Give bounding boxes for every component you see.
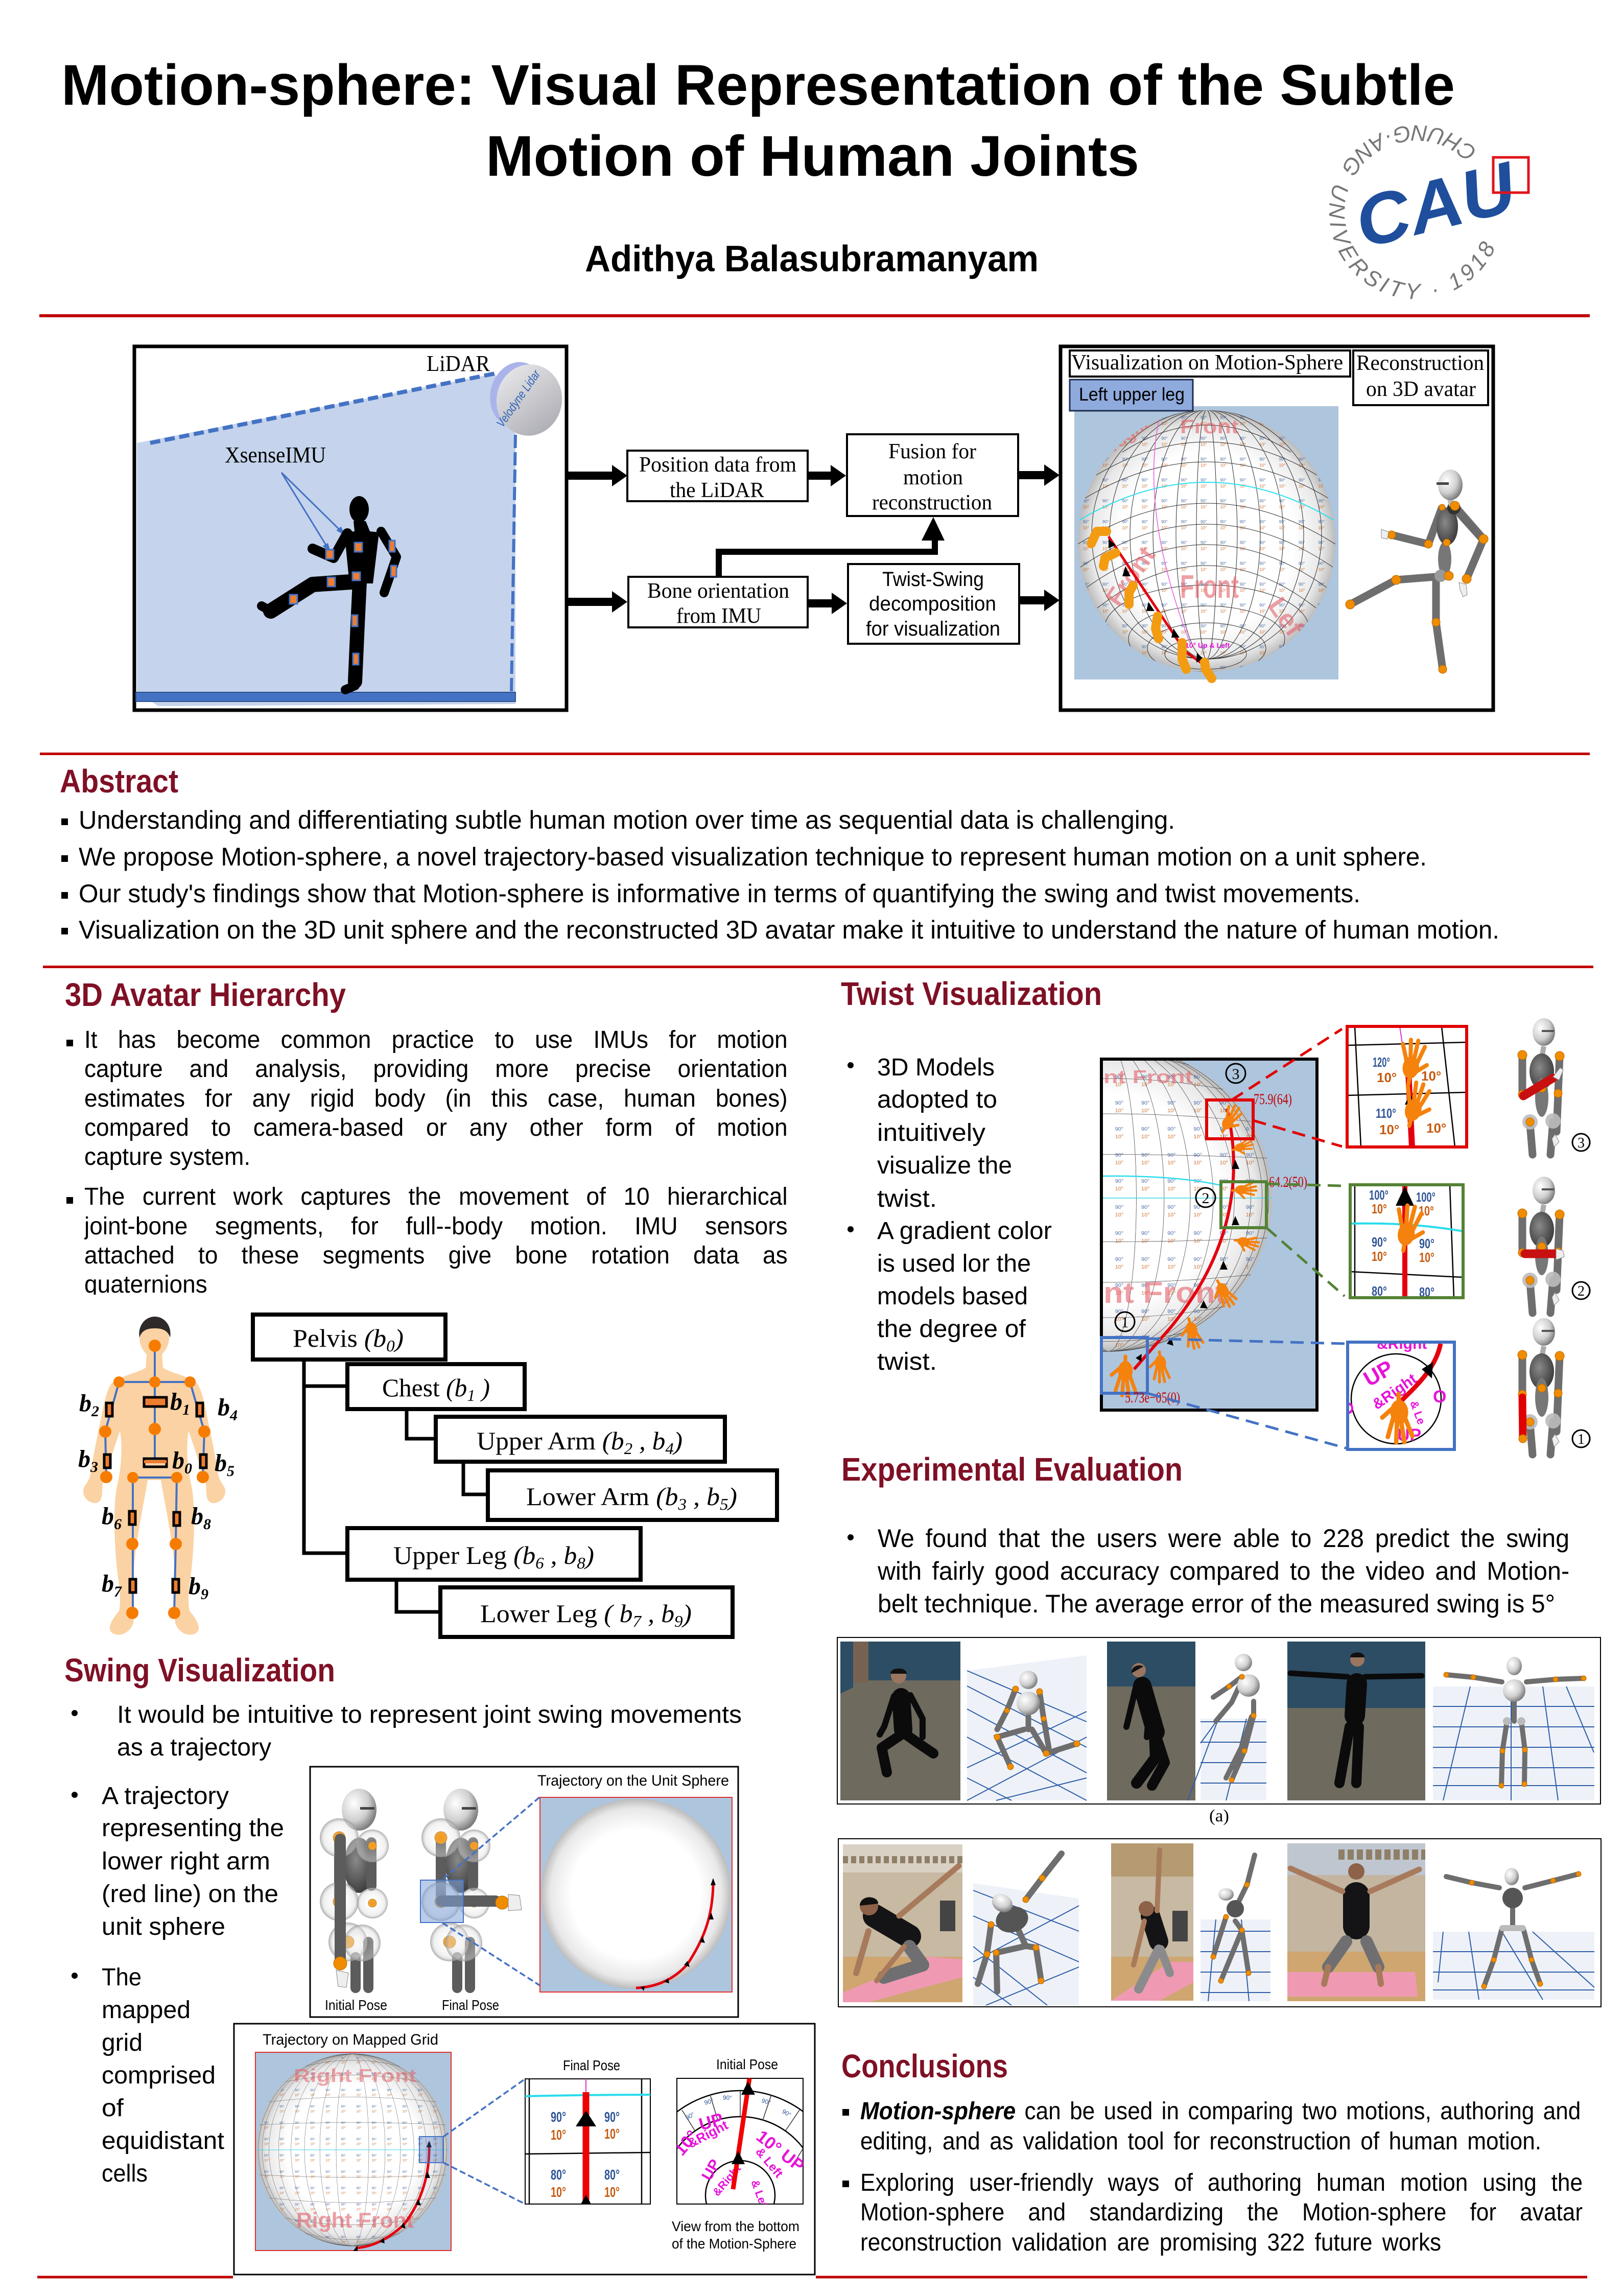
inset: blue twist detail: UP: [1397, 1425, 1421, 1445]
inset: green twist detail: 80°: [1372, 1283, 1387, 1299]
label: reconstruction on 3D avatar: [1353, 350, 1488, 405]
chart: joint hierarchy tree: ): [672, 1426, 682, 1455]
arrows: sensor pointer: [281, 473, 344, 551]
mannequin 3: 3: [1578, 1135, 1585, 1151]
box: fusion: motion: [903, 466, 963, 489]
bullet: experimental evaluation: [848, 1534, 854, 1540]
text block: experimental evaluation: [878, 1517, 1572, 1625]
panel: trajectory on the unit sphere: Initial Pose: [325, 1997, 387, 2013]
bone labels: b: [218, 1394, 230, 1421]
text block: abstract bullets: We propose Motion-sphere, a novel trajectory-based visualization technique to represent human motion on a unit sphere.: [79, 842, 1427, 871]
chart: joint hierarchy tree: 8: [577, 1554, 585, 1572]
inset: green twist detail: 90°: [1372, 1234, 1387, 1250]
text block: hierarchy paragraph 1: It has become common practice to use IMUs for motion: [84, 1026, 788, 1053]
text block: conclusions: Exploring user-friendly ways of authoring human motion using the: [860, 2169, 1583, 2196]
mannequin 1: [1518, 1318, 1590, 1455]
text block: swing bullets: representing the: [102, 1815, 284, 1842]
chart: joint hierarchy tree: Chest (b: [382, 1373, 467, 1402]
sphere with mapped grid: Right Front: [294, 2065, 416, 2086]
render: X pose avatar: [1433, 1868, 1594, 2000]
bone labels: b: [102, 1503, 114, 1530]
panel: trajectory on the unit sphere: Final Pose: [442, 1997, 499, 2013]
inset: initial pose: 90°: [761, 2097, 772, 2106]
render: side bend avatar: [1201, 1855, 1270, 2001]
chart: joint hierarchy tree: 0: [386, 1337, 395, 1355]
inset: green twist detail: 100°: [1369, 1187, 1388, 1203]
chart: joint hierarchy tree: ): [681, 1599, 692, 1628]
text block: hierarchy paragraph 1: estimates for any rigid body (in this case, human bones): [84, 1085, 788, 1112]
chart: joint hierarchy tree: 3: [677, 1495, 687, 1513]
bone labels: 4: [229, 1407, 238, 1424]
text block: swing bullets: equidistant: [102, 2127, 224, 2154]
callout lines: [1147, 1029, 1347, 1448]
title: Motion of Human Joints: [486, 124, 1139, 188]
text block: swing bullets: unit sphere: [102, 1913, 225, 1940]
render: lunge avatar: [967, 1655, 1087, 1800]
inset: blue twist detail: &Right: [1377, 1336, 1427, 1352]
chart: motion sphere with left upper leg trajectory: Right: [1105, 414, 1152, 456]
text block: conclusions: Motion-sphere and standardizing the Motion-sphere for avatar: [860, 2199, 1583, 2226]
text block: swing bullets: The: [102, 1964, 142, 1991]
box: bone orientation: from IMU: [676, 604, 761, 628]
photo: lunge: [840, 1642, 960, 1800]
heading: 3D avatar hierarchy: 3D Avatar Hierarchy: [65, 976, 346, 1013]
chart: twist trajectory on sphere: 5.73e−05(0): [1125, 1389, 1180, 1406]
inset: green twist detail: [1350, 1185, 1463, 1300]
text block: abstract bullets: Our study's findings show that Motion-sphere is informative in terms of quantifying the swing and twist movements.: [79, 879, 1360, 908]
inset: initial pose: & Left: [748, 2178, 771, 2213]
text block: swing bullets: [72, 1701, 742, 2187]
university logo: CHUNG·ANG: [1344, 125, 1474, 175]
caption: bottom view: View from the bottom: [672, 2218, 799, 2234]
inset: initial pose: [676, 2078, 804, 2205]
text block: twist bullets: twist.: [877, 1185, 937, 1212]
text block: conclusions: [860, 2090, 1586, 2263]
text block: hierarchy paragraph 2: [84, 1180, 788, 1295]
chart: twist trajectory on sphere: nt Front: [1103, 1276, 1226, 1309]
inset: blue twist detail: & Le: [1407, 1399, 1428, 1426]
chart: joint hierarchy tree: ): [393, 1324, 404, 1352]
box: position data: [627, 451, 808, 502]
heading: experimental evaluation: Experimental Evaluation: [841, 1451, 1183, 1488]
box: twist-swing: for visualization: [866, 618, 1000, 640]
inset: red twist detail: 10°: [1421, 1068, 1441, 1084]
panel: trajectory on mapped grid: Trajectory on Mapped Grid: [263, 2031, 438, 2048]
mannequin: final pose: [421, 1789, 490, 1988]
text block: swing bullets: A trajectory: [102, 1783, 229, 1810]
bone labels: b: [189, 1573, 201, 1600]
inset: initial pose: UP: [698, 2157, 724, 2184]
text block: hierarchy paragraph 2: The current work captures the movement of 10 hierarchical: [84, 1183, 788, 1210]
inset: initial pose: &Right: [710, 2162, 744, 2198]
text block: twist bullets: intuitively: [877, 1119, 985, 1146]
inset: initial pose: 90°: [723, 2094, 732, 2101]
caption: bottom view: [672, 2218, 799, 2252]
bone labels: b: [170, 1388, 182, 1415]
box: twist-swing: [848, 564, 1019, 644]
inset: blue twist detail: O: [1337, 1401, 1357, 1415]
label: reconstruction on 3D avatar: on 3D avatar: [1366, 378, 1476, 401]
heading: twist visualization: Twist Visualization: [841, 975, 1102, 1012]
text block: swing bullets: as a trajectory: [117, 1734, 271, 1761]
box: bone orientation: Bone orientation: [647, 579, 789, 603]
bone labels: b: [79, 1390, 91, 1417]
text block: twist bullets: the degree of: [877, 1316, 1026, 1343]
inset: green twist detail: 10°: [1419, 1250, 1434, 1265]
box: fusion: [847, 434, 1018, 516]
chart: joint hierarchy tree: 7: [633, 1612, 642, 1630]
photo: T pose: [1287, 1642, 1425, 1800]
box: position data: the LiDAR: [670, 479, 764, 502]
box: fusion: reconstruction: [872, 491, 992, 514]
text block: abstract bullets: [61, 806, 1499, 944]
text block: conclusions: editing, and as validation tool for reconstruction of human motion.: [860, 2128, 1541, 2155]
chart: twist trajectory on sphere: 1: [1121, 1314, 1129, 1331]
chart: motion sphere with left upper leg trajectory: Front: [1100, 541, 1161, 611]
heading: abstract: Abstract: [60, 763, 178, 800]
sphere with mapped grid: Right Front: [296, 2208, 414, 2232]
chart: joint hierarchy tree: Pelvis (b: [293, 1324, 386, 1352]
render: reach avatar: [973, 1854, 1079, 2005]
text block: conclusions: Motion-sphere can be used in comparing two motions, authoring and: [860, 2098, 1581, 2125]
text block: abstract bullets: Visualization on the 3D unit sphere and the reconstructed 3D avatar make it intuitive to understand the nature of human motion.: [79, 916, 1499, 944]
chart: joint hierarchy tree: , b: [544, 1541, 577, 1569]
text block: hierarchy paragraph 2: joint-bone segments, for full--body motion. IMU sensors: [84, 1213, 788, 1240]
panel: trajectory on the unit sphere: Trajectory on the Unit Sphere: [537, 1772, 729, 1789]
box: fusion: Fusion for: [888, 440, 976, 463]
label: visualization on motion-sphere: Visualization on Motion-Sphere: [1071, 351, 1343, 374]
inset: red twist detail: 10°: [1379, 1122, 1399, 1137]
chart: twist trajectory on sphere: [945, 1045, 1317, 1410]
inset: final pose: 10°: [551, 2127, 566, 2143]
caption: (a): (a): [1209, 1807, 1229, 1825]
inset: final pose: 80°: [604, 2167, 620, 2183]
text block: swing bullets: grid: [102, 2029, 143, 2056]
inset: green twist detail: 10°: [1372, 1201, 1387, 1216]
text block: twist bullets: A gradient color: [877, 1217, 1052, 1245]
bone labels: 2: [91, 1403, 99, 1420]
inset: red twist detail: 10°: [1426, 1120, 1446, 1136]
chart: joint hierarchy tree: 5: [720, 1495, 728, 1513]
text block: hierarchy paragraph 1: capture and analysis, providing more precise orientation: [84, 1056, 788, 1083]
inset: initial pose: 90°: [703, 2097, 714, 2106]
inset: blue twist detail: O: [1433, 1387, 1446, 1407]
mannequin 3: [1518, 1018, 1590, 1155]
chart: joint hierarchy tree: , b: [641, 1599, 674, 1628]
text block: abstract bullets: Understanding and differentiating subtle human motion over time as sequential data is challenging.: [79, 806, 1175, 834]
bone labels: 1: [182, 1401, 190, 1418]
inset: blue twist detail: &Right: [1369, 1370, 1420, 1413]
heading: swing visualization: Swing Visualization: [64, 1652, 335, 1689]
label: Xsense IMU: XsenseIMU: [225, 442, 326, 467]
text block: hierarchy paragraph 1: [84, 1022, 788, 1180]
title: Motion-sphere: Visual Representation of the Subtle: [61, 53, 1455, 117]
bone labels: 9: [201, 1586, 208, 1603]
bone labels: [78, 1388, 238, 1603]
author: Adithya Balasubramanyam: [585, 239, 1039, 279]
university logo: CAU: [1347, 146, 1525, 263]
bone labels: 8: [203, 1516, 211, 1533]
inset: green twist detail: 90°: [1419, 1236, 1434, 1251]
inset: initial pose: 10° UP: [752, 2126, 808, 2176]
label: reconstruction on 3D avatar: Reconstruction: [1356, 352, 1484, 375]
inset: initial pose: 90°: [781, 2107, 792, 2119]
bone labels: b: [191, 1503, 203, 1530]
bone labels: 5: [227, 1463, 234, 1480]
inset: final pose: 10°: [551, 2184, 566, 2200]
inset: initial pose: 10°: [670, 2127, 702, 2160]
text block: experimental evaluation: with fairly good accuracy compared to the video and Motion-: [878, 1557, 1569, 1585]
bone labels: 6: [114, 1516, 122, 1533]
mannequin 1: 1: [1578, 1432, 1585, 1447]
text block: hierarchy paragraph 1: capture system.: [84, 1143, 250, 1170]
bullets: hierarchy text: [66, 1040, 73, 1204]
bullets: conclusions: [842, 2109, 849, 2187]
silhouette with IMU sensors: [262, 496, 396, 690]
chart: joint hierarchy tree: [253, 1315, 777, 1637]
panel: trajectory on mapped grid: Initial Pose: [716, 2056, 778, 2072]
chart: joint hierarchy tree: 2: [624, 1439, 632, 1458]
text block: swing bullets: (red line) on the: [102, 1881, 278, 1908]
text block: experimental evaluation: belt technique. The average error of the measured swing is 5°: [878, 1589, 1555, 1618]
inset: green twist detail: 10°: [1372, 1249, 1387, 1264]
photo: side bend: [1111, 1843, 1193, 2001]
photo: X pose: [1287, 1843, 1425, 2001]
bone labels: b: [172, 1447, 184, 1474]
text block: swing bullets: mapped: [102, 1997, 191, 2024]
photo: side reach lunge: [843, 1844, 962, 2002]
bone labels: b: [78, 1445, 90, 1472]
chart: joint hierarchy tree: ): [475, 1373, 490, 1402]
render: T pose avatar: [1433, 1657, 1594, 1800]
flow arrows: [568, 464, 1060, 614]
bone labels: 3: [90, 1459, 98, 1475]
box: twist-swing: decomposition: [869, 593, 996, 615]
inset: red twist detail: [1347, 1026, 1467, 1147]
inset: red twist detail: 110°: [1376, 1106, 1396, 1121]
chart: joint hierarchy tree: Lower Arm (b: [526, 1482, 677, 1511]
label: LiDAR: LiDAR: [427, 351, 490, 376]
text block: hierarchy paragraph 1: compared to camera-based or any other form of motion: [84, 1114, 788, 1141]
chart: twist trajectory on sphere: 3: [1232, 1066, 1239, 1083]
inset: final pose: 90°: [604, 2109, 620, 2125]
panel: photos and avatars (b): [838, 1839, 1601, 2007]
figure: body with sensors: [78, 1317, 238, 1635]
inset: initial pose: & Left: [752, 2145, 786, 2181]
text block: twist bullets: is used lor the: [877, 1250, 1031, 1277]
text block: conclusions: reconstruction validation are promising 322 future works: [860, 2229, 1441, 2256]
icon: LiDAR sensor: [483, 356, 568, 441]
text block: twist bullets: twist.: [877, 1348, 937, 1375]
chart: motion sphere with left upper leg trajectory: Front: [1180, 416, 1239, 438]
panel: trajectory on the unit sphere: [310, 1767, 738, 2017]
label: left upper leg: [1070, 380, 1193, 411]
text block: swing bullets: cells: [102, 2160, 148, 2187]
bone labels: b: [215, 1449, 227, 1477]
panel: photos and avatars (a): [837, 1637, 1601, 1804]
inset: initial pose: 90°: [685, 2111, 696, 2122]
inset: initial pose: &Right: [685, 2117, 731, 2151]
chart: joint hierarchy tree: ): [727, 1482, 737, 1511]
inset: blue twist detail: [1337, 1336, 1454, 1449]
inset: final pose: 80°: [551, 2167, 566, 2183]
inset: green twist detail: 10°: [1419, 1203, 1434, 1219]
heading: conclusions: Conclusions: [841, 2048, 1008, 2084]
chart: joint hierarchy tree: 9: [674, 1612, 683, 1630]
text block: twist bullets: [848, 1054, 1052, 1375]
text block: hierarchy paragraph 2: attached to these segments give bone rotation data as: [84, 1242, 788, 1269]
text block: experimental evaluation: We found that the users were able to 228 predict the swing: [878, 1524, 1569, 1553]
chart: twist trajectory on sphere: nt Front: [1103, 1066, 1193, 1087]
bone labels: 7: [114, 1583, 122, 1600]
text block: swing bullets: of: [102, 2095, 124, 2122]
text block: swing bullets: It would be intuitive to represent joint swing movements: [117, 1701, 742, 1728]
text block: swing bullets: comprised: [102, 2062, 216, 2089]
text block: twist bullets: adopted to: [877, 1086, 997, 1113]
sphere with mapped grid: [255, 2052, 451, 2251]
inset: final pose: [525, 2079, 650, 2204]
inset: final pose: 10°: [604, 2126, 620, 2142]
chart: joint hierarchy tree: ): [584, 1541, 594, 1569]
box: bone orientation: [628, 577, 808, 628]
caption: bottom view: of the Motion-Sphere: [672, 2236, 796, 2252]
chart: joint hierarchy tree: 4: [665, 1439, 674, 1458]
chart: motion sphere with left upper leg trajectory: Left: [1262, 592, 1314, 649]
render: back bend avatar: [1188, 1654, 1266, 1800]
panel: trajectory on mapped grid: [233, 2023, 815, 2276]
inset: green twist detail: 100°: [1416, 1189, 1435, 1205]
chart: joint hierarchy tree: Upper Arm (b: [477, 1426, 623, 1455]
icon: LiDAR sensor: Velodyne Lidar: [494, 367, 544, 430]
mannequin 2: [1518, 1177, 1590, 1313]
chart: motion sphere with left upper leg trajectory: 10° Up & Left: [1185, 641, 1230, 649]
inset: blue twist detail: UP: [1359, 1355, 1397, 1391]
chart: twist trajectory on sphere: 75.9(64): [1254, 1091, 1292, 1108]
text block: swing bullets: lower right arm: [102, 1848, 270, 1875]
inset: red twist detail: 10°: [1377, 1070, 1397, 1085]
mannequin 2: 2: [1578, 1283, 1585, 1299]
box: twist-swing: Twist-Swing: [882, 568, 984, 591]
sphere with red trajectory: [540, 1797, 732, 1992]
chart: joint hierarchy tree: Upper Leg (b: [393, 1541, 535, 1569]
inset: red twist detail: 120°: [1373, 1055, 1390, 1070]
text block: twist bullets: 3D Models: [877, 1054, 995, 1081]
bone labels: b: [102, 1570, 114, 1597]
panel: capture setup: [134, 346, 568, 710]
photo: back bend: [1107, 1642, 1195, 1800]
chart: motion sphere with left upper leg trajectory: Front: [1180, 568, 1239, 605]
chart: joint hierarchy tree: 6: [535, 1554, 544, 1572]
title: [61, 53, 1455, 188]
chart: joint hierarchy tree: Lower Leg ( b: [480, 1599, 631, 1628]
inset: final pose: 90°: [551, 2109, 566, 2125]
inset: green twist detail: 80°: [1419, 1284, 1434, 1300]
label: left upper leg: Left upper leg: [1079, 384, 1185, 405]
chart: twist trajectory on sphere: 64.2(50): [1269, 1174, 1307, 1190]
mannequin: initial pose: [320, 1789, 389, 1988]
panel: visualization and reconstruction: [1061, 346, 1493, 710]
chart: joint hierarchy tree: , b: [632, 1426, 665, 1455]
3D avatar: [1346, 470, 1488, 673]
chart: motion sphere with left upper leg trajectory: [1074, 406, 1338, 680]
university logo: UNIVERSITY · 1918: [1329, 185, 1494, 299]
text block: twist bullets: visualize the: [877, 1152, 1012, 1179]
bone labels: 0: [184, 1460, 192, 1477]
inset: initial pose: UP: [697, 2110, 725, 2135]
text block: twist bullets: models based: [877, 1283, 1028, 1310]
university logo: [1324, 120, 1528, 304]
chart: twist trajectory on sphere: 2: [1202, 1190, 1210, 1207]
chart: joint hierarchy tree: , b: [687, 1482, 720, 1511]
chart: joint hierarchy tree: 1: [467, 1386, 475, 1404]
box: position data: Position data from: [639, 453, 796, 477]
inset: final pose: 10°: [604, 2184, 620, 2200]
panel: trajectory on mapped grid: Final Pose: [563, 2057, 620, 2073]
